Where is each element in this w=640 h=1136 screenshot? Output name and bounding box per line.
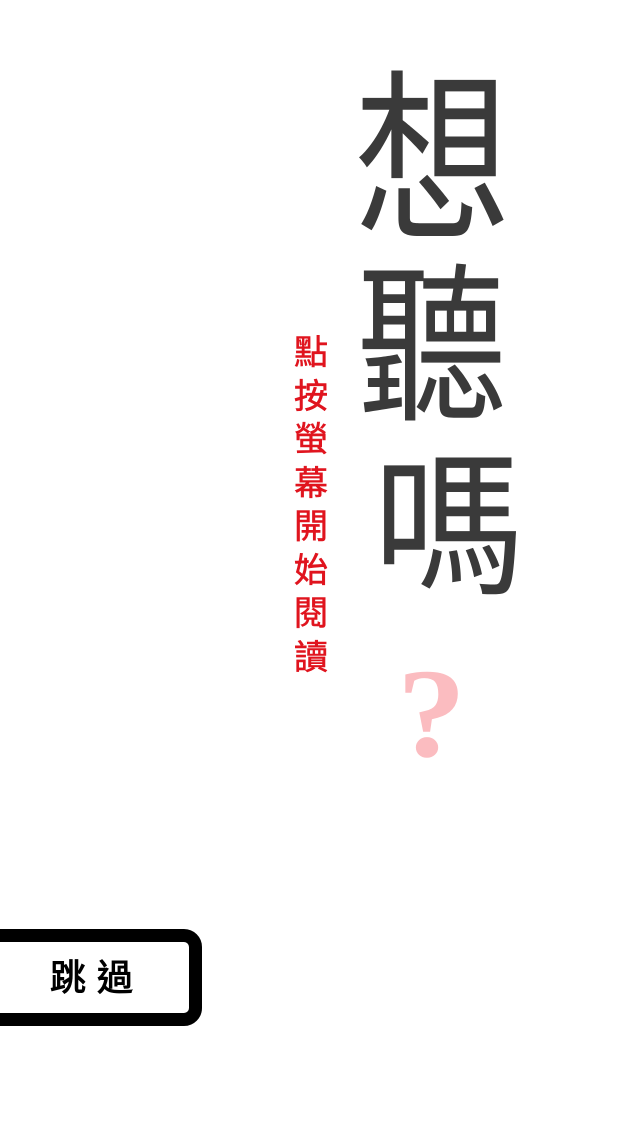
vertical hint text: 讀 [294,638,328,676]
vertical hint text: 閱 [294,595,328,633]
question mark: ? [397,643,466,784]
skip button label: 跳過 [50,957,144,998]
vertical hint text: 點 [294,334,328,372]
vertical hint text: 幕 [294,464,328,502]
title: first character: 想 [354,59,511,265]
skip button frame [0,929,202,1026]
vertical hint text: 始 [294,552,328,590]
title: second character: 聽 [357,252,507,443]
title: third character: 嗎 [373,441,525,616]
vertical hint text [294,334,328,676]
vertical hint text: 螢 [294,421,328,459]
vertical hint text: 按 [294,378,328,416]
vertical hint text: 開 [294,508,328,546]
